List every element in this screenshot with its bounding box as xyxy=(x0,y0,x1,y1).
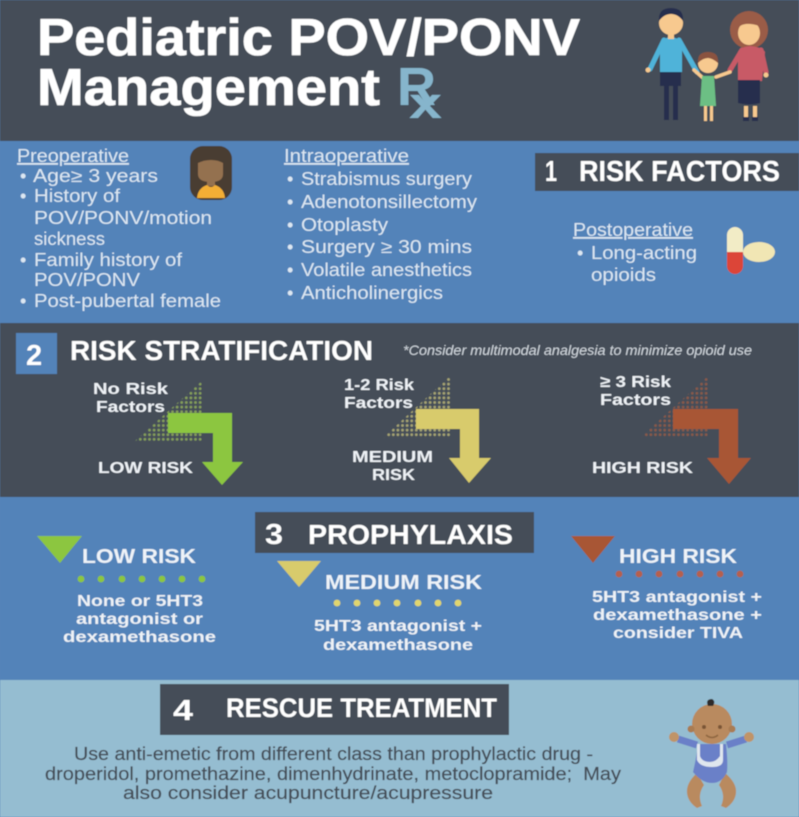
text block: intraoperative: Volatile anesthetics xyxy=(301,260,472,280)
low risk column: antagonist or xyxy=(76,611,203,628)
heading: 1 risk factors: RISK FACTORS xyxy=(579,156,780,188)
low risk column: None or 5HT3 xyxy=(77,593,203,610)
high risk arrow: ≥ 3 Risk xyxy=(600,374,671,391)
text block: intraoperative xyxy=(284,146,477,303)
medium risk column: 5HT3 antagonist + xyxy=(314,618,482,635)
icon: pills xyxy=(727,227,775,274)
icon: Rx symbol: x xyxy=(409,79,443,128)
medium risk column: dexamethasone xyxy=(323,637,473,654)
heading: 3 prophylaxis: PROPHYLAXIS xyxy=(308,519,513,550)
text block: preoperative: Post-pubertal female xyxy=(34,291,221,311)
text block: intraoperative: Strabismus surgery xyxy=(301,169,472,189)
medium risk column: MEDIUM RISK xyxy=(325,572,483,594)
text block: rescue treatment: droperidol, promethazine, dimenhydrinate, metoclopramide; May xyxy=(45,764,621,784)
heading: 4 rescue treatment: RESCUE TREATMENT xyxy=(226,693,497,723)
heading: 2 risk stratification xyxy=(16,333,373,374)
text block: rescue treatment: Use anti-emetic from different class than prophylactic drug - xyxy=(74,744,593,764)
text block: postoperative xyxy=(573,220,697,285)
title: Pediatric POV/PONV xyxy=(37,9,580,67)
low risk arrow: Factors xyxy=(96,399,165,416)
text block: preoperative: POV/PONV/motion xyxy=(34,208,212,228)
text block: preoperative: • xyxy=(20,291,26,311)
text block: preoperative: Preoperative xyxy=(17,146,129,166)
medium risk arrow xyxy=(344,376,491,484)
text block: rescue treatment: also consider acupuncture/acupressure xyxy=(123,783,493,803)
text block: intraoperative: Surgery ≥ 30 mins xyxy=(301,237,472,257)
icon: girl xyxy=(190,146,232,200)
panel: risk stratification xyxy=(16,333,752,485)
text block: intraoperative: • xyxy=(287,192,293,212)
text block: intraoperative: Anticholinergics xyxy=(301,283,443,303)
icon: child xyxy=(694,52,730,121)
high risk arrow: Factors xyxy=(600,392,671,409)
medium risk arrow: Factors xyxy=(344,395,413,412)
icon: mother xyxy=(730,11,768,121)
medium risk arrow: 1-2 Risk xyxy=(344,377,414,394)
title xyxy=(37,9,580,117)
high risk column: dexamethasone + xyxy=(593,607,762,624)
high risk arrow xyxy=(592,374,751,484)
panel: rescue treatment xyxy=(45,684,754,808)
low risk arrow: No Risk xyxy=(93,381,168,398)
heading: 1 risk factors: 1 xyxy=(545,156,557,188)
panel: prophylaxis xyxy=(37,512,762,654)
high risk column xyxy=(571,536,762,642)
heading: 4 rescue treatment: 4 xyxy=(173,695,193,727)
heading: 4 rescue treatment xyxy=(160,684,509,735)
text block: intraoperative: Intraoperative xyxy=(284,146,409,166)
heading: 2 risk stratification: RISK STRATIFICATION xyxy=(70,335,373,366)
icon: baby xyxy=(669,699,754,808)
text block: postoperative: opioids xyxy=(591,265,656,285)
title: Management xyxy=(37,59,380,117)
text block: intraoperative: • xyxy=(287,169,293,189)
text block: preoperative: POV/PONV xyxy=(34,270,140,290)
heading: 3 prophylaxis xyxy=(255,512,534,553)
heading: 1 risk factors xyxy=(535,153,799,191)
high risk column: consider TIVA xyxy=(613,625,744,642)
text block: intraoperative: Adenotonsillectomy xyxy=(301,192,477,212)
icon: father xyxy=(646,8,697,120)
text block: postoperative: Postoperative xyxy=(573,220,693,240)
low risk column: LOW RISK xyxy=(82,546,197,568)
medium risk arrow: RISK xyxy=(372,467,415,484)
heading: 3 prophylaxis: 3 xyxy=(265,519,283,551)
text block: preoperative xyxy=(17,146,221,311)
text block: intraoperative: • xyxy=(287,215,293,235)
text block: intraoperative: • xyxy=(287,260,293,280)
icon: Rx symbol: R xyxy=(397,57,436,117)
text block: intraoperative: • xyxy=(287,237,293,257)
text block: rescue treatment xyxy=(45,744,621,803)
text block: preoperative: • xyxy=(20,166,26,186)
panel: risk factors xyxy=(17,146,799,311)
text block: preoperative: History of xyxy=(34,186,121,206)
note: multimodal analgesia: *Consider multimodal analgesia to minimize opioid use xyxy=(403,342,752,358)
high risk column: HIGH RISK xyxy=(619,546,738,568)
text block: preoperative: Age≥ 3 years xyxy=(33,166,158,186)
text block: preoperative: • xyxy=(20,250,26,270)
icon: family xyxy=(646,8,768,121)
high risk arrow: HIGH RISK xyxy=(592,460,694,477)
heading: 2 risk stratification: 2 xyxy=(26,340,42,372)
text block: postoperative: • xyxy=(577,243,583,263)
low risk column: dexamethasone xyxy=(63,629,216,646)
low risk arrow xyxy=(93,380,243,485)
text block: intraoperative: • xyxy=(287,283,293,303)
low risk column xyxy=(37,536,216,646)
low risk arrow: LOW RISK xyxy=(98,460,194,477)
text block: preoperative: Family history of xyxy=(34,250,183,270)
medium risk column xyxy=(277,561,483,654)
text block: preoperative: • xyxy=(20,186,26,206)
text block: postoperative: Long-acting xyxy=(591,243,697,263)
text block: intraoperative: Otoplasty xyxy=(301,215,388,235)
text block: preoperative: sickness xyxy=(34,229,105,249)
high risk column: 5HT3 antagonist + xyxy=(592,589,762,606)
medium risk arrow: MEDIUM xyxy=(352,449,433,466)
